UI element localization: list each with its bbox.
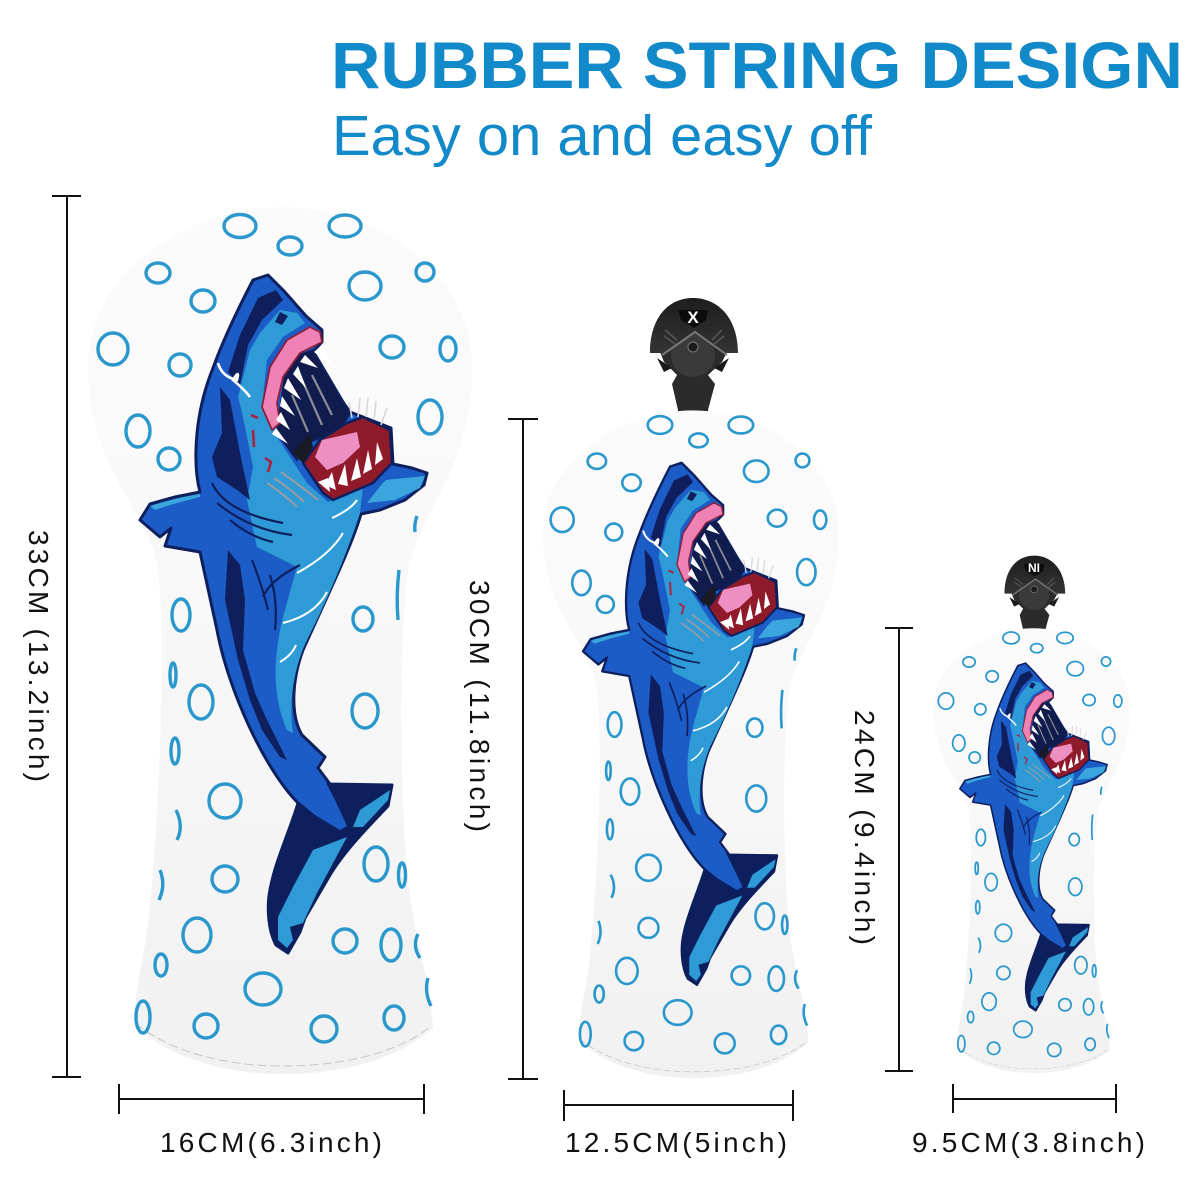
- gills and fin lines: [212, 483, 300, 630]
- width label: small: 9.5CM(3.8inch): [912, 1127, 1145, 1158]
- tail blue section: [285, 775, 347, 830]
- lower jaw: [303, 417, 392, 500]
- height label: small: 24CM (9.4inch): [849, 710, 880, 945]
- lower palate: [315, 432, 360, 470]
- lower teeth: [318, 442, 383, 492]
- fin highlights: [150, 476, 425, 510]
- shark belly: [238, 310, 363, 733]
- mouth: [277, 350, 350, 460]
- rubber clip: small cover: [1005, 556, 1065, 640]
- shark embroidery: [140, 275, 427, 953]
- width label: large: 16CM(6.3inch): [160, 1127, 382, 1158]
- headcover: large driver cover: [88, 207, 472, 1074]
- headcover: medium fairway cover: [543, 410, 839, 1078]
- rubber clip: medium cover: [650, 298, 738, 420]
- pink upper gum: [262, 327, 322, 430]
- clip letter X: X: [687, 308, 699, 327]
- shark body: [140, 275, 427, 953]
- height dimension: small: [885, 628, 913, 1071]
- width dimension: large: [119, 1084, 424, 1114]
- throat: [293, 433, 313, 463]
- height label: medium: 30CM (11.8inch): [464, 580, 495, 832]
- cover body: [88, 207, 472, 1074]
- headcover: small hybrid cover: [933, 628, 1130, 1073]
- subtitle: easy on and easy off: Easy on and easy off: [332, 104, 872, 168]
- bubbles: [98, 214, 456, 1042]
- width dimension: small: [953, 1084, 1116, 1113]
- title: rubber string design: RUBBER STRING DESIGN: [331, 28, 1183, 102]
- stitching: [136, 1024, 431, 1066]
- inner mouth lines: [292, 375, 332, 432]
- dark back markings: [212, 290, 288, 760]
- tail: [268, 780, 392, 953]
- height dimension: medium: [508, 419, 538, 1079]
- red slashes: [251, 415, 271, 472]
- fine upper teeth threads: [349, 398, 387, 425]
- width dimension: medium: [564, 1090, 793, 1121]
- clip letters small: NI: [1028, 561, 1040, 575]
- width label: medium: 12.5CM(5inch): [565, 1127, 787, 1158]
- white belly lines: [280, 500, 357, 662]
- right fin top: [370, 466, 424, 496]
- tail highlights: [278, 790, 390, 948]
- scar and hook mark: [218, 363, 250, 397]
- height dimension: large: [52, 196, 81, 1077]
- height label: large: 33CM (13.2inch): [23, 530, 54, 782]
- upper teeth: [272, 345, 334, 444]
- grey scratches: [267, 472, 318, 507]
